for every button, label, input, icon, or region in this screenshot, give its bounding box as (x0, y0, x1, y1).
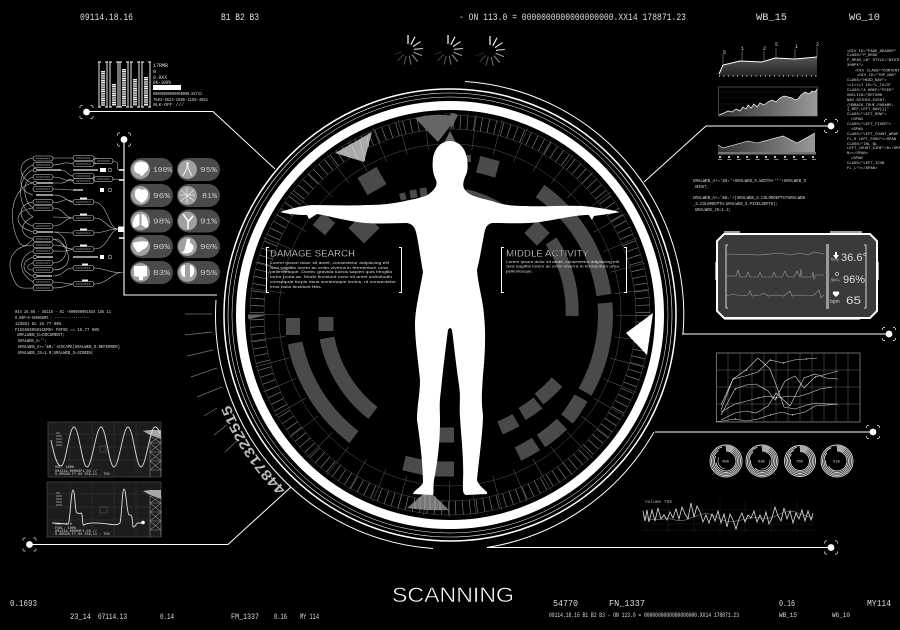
code lines mid right: URALWEB_A+='&D='+(URALWEB_S.COLORDEPTH?URALWEB (693, 195, 805, 201)
volume waveform (643, 499, 814, 533)
guide circles (250, 115, 650, 515)
gauge 45%: 45% (722, 460, 730, 464)
left code text block (15, 309, 120, 356)
footer data row: FN_1337 (609, 598, 645, 609)
text block: damage search: DAMAGE SEARCH (270, 248, 355, 260)
footer data row: 54770 (553, 598, 578, 609)
pill: nerve 81%: 81% (202, 193, 218, 201)
code column right: CLASS="P_HEAD (847, 53, 878, 58)
text block: damage search: pellentesque. Donec gravida luctus sapien quis fringilla (270, 269, 393, 274)
volume waveform: Volume 70% (645, 499, 672, 505)
pill: heart 96%: 96% (153, 193, 171, 201)
chart: rising noisy area (718, 87, 818, 116)
connector: top left marker to ring (80, 106, 275, 169)
footer data row: 0.16 (274, 613, 287, 622)
left code text block: 12S8SJ DL 16 77 99% (15, 321, 61, 327)
donut gauges (710, 445, 853, 477)
title: scanning: SCANNING (392, 583, 514, 607)
text block: damage search: Sed sagittis lorem ac enim viverra in fermentum urna (270, 265, 389, 270)
footer data row: MY 114 (300, 613, 319, 622)
code column right: FL_L"></SPAN> (847, 166, 878, 171)
chart: top area with pins: 1 (741, 46, 744, 52)
central scanner dial (216, 82, 684, 548)
level bars with readout: 7503-5523-2585-1185-4851 (153, 97, 208, 103)
pill: stomach 90%: 90% (200, 244, 218, 252)
code lines mid right: .HEIGHT; (693, 184, 708, 190)
code column right: CLASS="LEFT_ROW"> (847, 112, 887, 117)
text block: middle activity: Lorem ipsum dolor sit amet, consectetur adipiscing elit (506, 259, 620, 264)
radial ticks outside ring (185, 314, 238, 452)
pulse readout (830, 291, 861, 307)
tick ring (257, 122, 643, 508)
gauge 63% (746, 445, 778, 477)
radial spokes (266, 131, 634, 499)
header data row: WB_15 (756, 13, 787, 24)
waveform panel: ECG: VOL: 1.0 (55, 523, 72, 527)
text block: damage search: Lorem ipsum dolor sit amet, consectetur adipiscing elit (270, 260, 390, 265)
SpO2 readout: SpO₂ (831, 278, 841, 282)
waveform panel: ECG: FUEL: 100% (55, 527, 77, 531)
chart: lower area with bars (718, 133, 816, 160)
code column right: <DIV ID="PAGE_HEADER" (847, 49, 896, 54)
gauge 45% (710, 445, 742, 477)
left code text block: 0.50M-6-9999SUMS - ----------------- (15, 315, 90, 321)
footer data row: 07114.13 (98, 613, 127, 622)
header data row: WG_10 (849, 13, 880, 24)
text block: middle activity: MIDDLE ACTIVITY (506, 248, 590, 260)
code column right: FL_R LEFT_FOOD"><SPAN (847, 137, 897, 142)
temperature readout: 36.6° (841, 252, 867, 264)
rotated scan number: 44871322515 (221, 406, 284, 492)
footer data row: WG_10 (832, 612, 850, 619)
pill: brain 100%: 100% (153, 167, 173, 175)
connector: lower left marker to ring (23, 487, 291, 551)
bottom grey triangle (407, 490, 449, 510)
code column right (847, 49, 900, 171)
pill: intestine 83%: 83% (153, 270, 171, 278)
footer data row (10, 598, 891, 622)
pill: vessel 91%: 91% (200, 218, 218, 226)
left code text block: URALWEB_JS=1.0;URALWEB_S=SCREEN; (18, 350, 94, 356)
top grey triangle (415, 115, 457, 142)
code column right: CLASS="LEFT_ICON (847, 161, 885, 166)
text block: middle activity (502, 248, 626, 292)
footer data row: 0.16 (779, 598, 795, 609)
footer data row: MY114 (867, 598, 891, 609)
pill: kidneys 95%: 95% (200, 270, 218, 278)
code column right: <SPAN (851, 127, 863, 132)
level bars with readout: 0.0XX (153, 75, 167, 81)
text block: damage search: eros nulla tincidunt felis. (270, 284, 322, 289)
text block: middle activity: Sed sagittis lorem ac enim viverra in fermentum urna (506, 264, 620, 268)
waveform panel: ECG: 001214.00060F1.03 // (55, 529, 97, 534)
grey squares (313, 155, 550, 246)
left code text block: URALWEB_D=DOCUMENT; (17, 332, 65, 338)
chart: top area with pins (719, 42, 819, 76)
chart: top area with pins: 2 (763, 46, 766, 52)
vital signs monitor (716, 232, 878, 319)
code column right: <SPAN (851, 117, 863, 122)
text block: damage search (266, 248, 402, 292)
footer data row: FM_1337 (231, 613, 259, 622)
grey arc segments (293, 191, 605, 469)
monitor traces (726, 252, 824, 298)
left code text block: URALWEB_A+='&R='+ESCAPE(URALWEB_D.REFERRER) (18, 344, 120, 350)
level bars with readout (98, 62, 208, 108)
SpO2 readout (831, 272, 865, 286)
waveform panel: sine: 001214.00060F1.03 // (55, 469, 97, 474)
code column right: <SPAN (851, 156, 863, 161)
text block: middle activity: pellentesque. (506, 268, 533, 274)
text block: damage search: consequat turpis risus scelerisque lectus, ut consectetur (270, 279, 397, 284)
multi-line grid chart (716, 353, 860, 422)
code column right: CLASS="A HREF="FEED" (847, 88, 894, 93)
code column right: <LI><LI ID="L_TAJ3" (847, 83, 891, 88)
connector: right marker to outer arc (682, 328, 896, 340)
loading spinners (394, 35, 505, 66)
node wiring diagram (10, 156, 124, 290)
chart: top area with pins: 1 (795, 44, 798, 50)
level bars with readout: 17RMB (153, 63, 168, 69)
footer data row: 0.1693 (10, 598, 37, 609)
code lines mid right (692, 178, 806, 213)
gauge 51% (821, 445, 853, 477)
code lines mid right: URALWEB_A+='&S='+URALWEB_S.WIDTH+'*'+URALWEB_S (693, 178, 806, 184)
connector: organ panel bracket (118, 133, 217, 295)
waveform panel: sine (48, 422, 161, 477)
level bars with readout: 0LK-OFF /// (153, 102, 184, 108)
footer data row: WB_15 (779, 612, 797, 619)
left code text block: URALWEB_A=''; (18, 338, 47, 344)
code column right: CLASS="INL_BL (847, 142, 878, 147)
header data row: 09114.18.16 (80, 13, 133, 24)
level bars with readout: 0 (153, 69, 156, 75)
code column right: CLASS="LEFT_COUNT_WRAP (847, 132, 899, 137)
header data row: B1 B2 B3 (221, 13, 259, 24)
gauge 51%: 51% (833, 460, 841, 464)
pill: lungs airway 95%: 95% (200, 167, 218, 175)
level bars with readout: 00000000000000000.82741 (153, 91, 202, 97)
code column right: {_REF.LEFT_NAV}}}" (847, 107, 889, 112)
level bars with readout: 0K-100% (153, 80, 171, 86)
waveform panel: ECG (47, 482, 161, 537)
code column right: NAV.SOTHIS.EVENT. (847, 99, 887, 103)
SpO2 readout: 96% (843, 274, 865, 286)
connector: upper right marker to ring (644, 120, 838, 182)
header data row: - ON 113.0 = 0000000000000000000.XX14 178871.23 (459, 13, 686, 24)
code column right: LEFT_COUNT_SIDE">0</SPA (847, 146, 900, 151)
left code text block: 044 16.98 - 48116 - 01 -0000000016XX 185 11 (15, 309, 111, 315)
code lines mid right: _S.COLORDEPTH:URALWEB_S.PIXELDEPTH); (692, 201, 778, 207)
top light triangle (335, 132, 372, 162)
waveform panel: ECG: S.00590.F7.00 256.11 - 75% (55, 533, 111, 537)
gauge 76%: 76% (796, 460, 804, 464)
text block: damage search: tortor porta ac. Morbi tincidunt nunc sit amet sollicitudin (270, 274, 392, 279)
human body silhouette (280, 141, 620, 495)
code column right: N></SPAN> (847, 151, 869, 156)
left code text block: F1555869581S5M5> F0FSD == 16.77 98% (15, 327, 99, 333)
code column right: (HDBACK.TRUE.PARAMS: (847, 103, 894, 108)
thin outer rings (216, 82, 684, 548)
right white triangle (626, 313, 653, 355)
thick white ring (240, 106, 660, 524)
pulse readout: bpm (830, 299, 840, 305)
code column right: CLASS="LEFT_FIXER"> (847, 122, 892, 127)
waveform panel: sine: S.00590.F7.00 256.11 - 75% (55, 473, 111, 477)
pill: lungs 98%: 98% (153, 218, 171, 226)
connector: lower right marker to arc (655, 426, 880, 438)
code column right: ONCLICK="RETURN (847, 93, 883, 98)
temperature readout: temp (831, 258, 839, 262)
gauge 76% (784, 446, 816, 476)
footer data row: 0.14 (160, 613, 174, 622)
footer data row: 09114.18.16 B1 B2 B3 - ON 113.0 = 0000000000000000000.XX14 178871.23 (549, 612, 739, 619)
code column right: 300PX"> (847, 63, 864, 68)
pulse readout: 65 (846, 295, 861, 307)
waveform panel: sine: VOL: 100% (55, 466, 75, 470)
pill: liver 90%: 90% (153, 244, 171, 252)
panel: organ status pills (130, 158, 220, 284)
code column right: CLASS="HEAD_NAV"> (847, 78, 887, 83)
chart: top area with pins: 5 (775, 42, 778, 48)
footer data row: 23_14 (70, 613, 91, 622)
chart: top area with pins: 5 (723, 50, 726, 56)
code lines mid right: URALWEB_JS=1.2; (695, 207, 731, 213)
code column right: <DIV ID="TOP_NAV" (857, 73, 897, 78)
gauge 63%: 63% (758, 460, 766, 464)
header data row (80, 13, 880, 24)
connector: bottom right marker (487, 541, 838, 554)
chart: top area with pins: 2 (816, 42, 819, 48)
